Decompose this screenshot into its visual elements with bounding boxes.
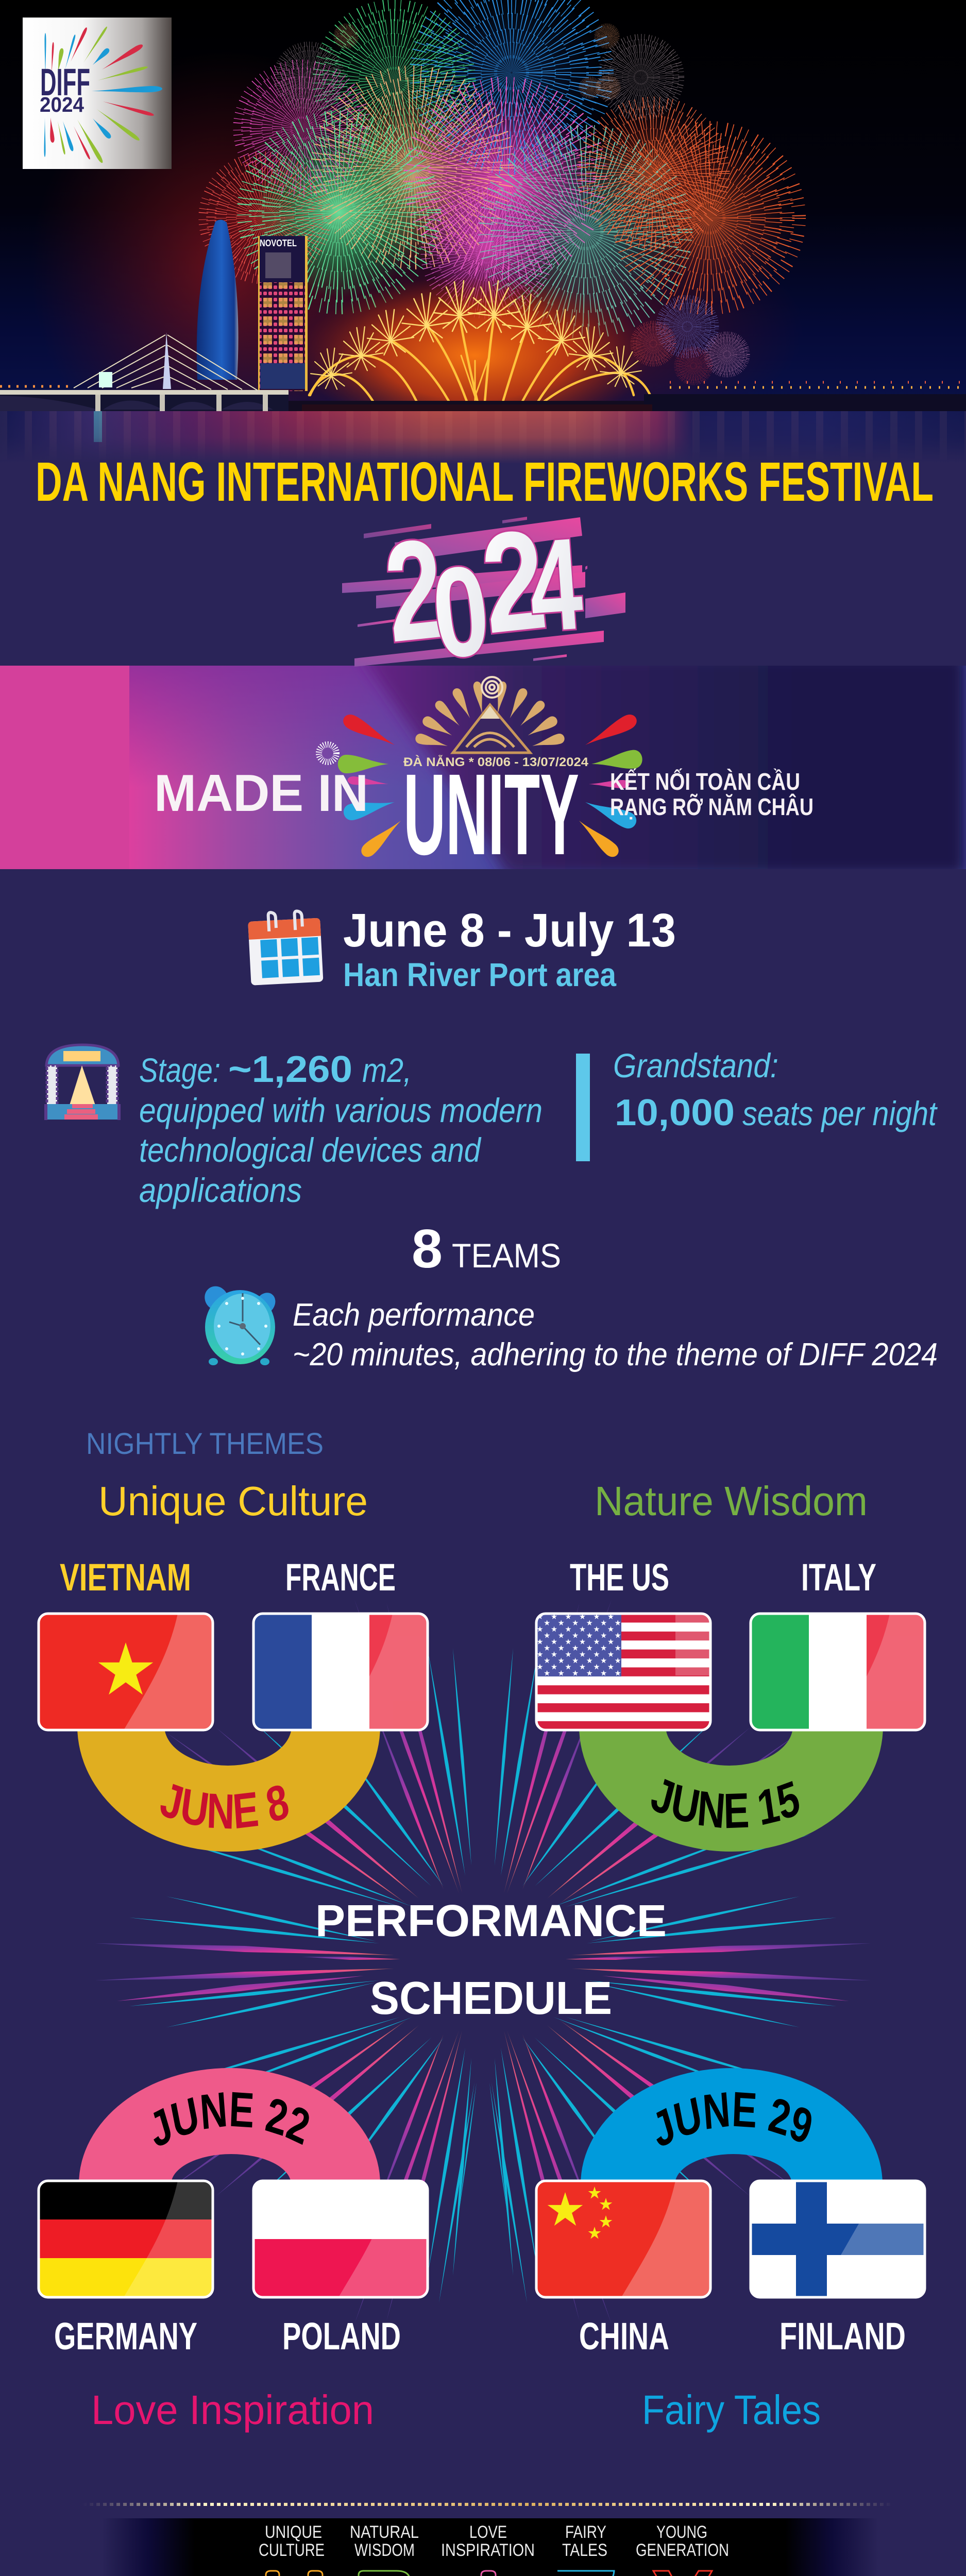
logo wordmark 2024: 2024 — [40, 93, 84, 116]
country: China — [536, 2181, 710, 2358]
slogan: RẠNG RỠ NĂM CHÂU — [610, 793, 814, 820]
letter I — [462, 2571, 515, 2576]
stage text: equipped with various modern — [139, 1091, 543, 1129]
icon: alarm clock — [200, 1282, 279, 1365]
strip labels: GENERATION — [636, 2540, 729, 2560]
theme names — [98, 1478, 868, 1524]
strip labels: TALES — [562, 2540, 607, 2560]
date — [161, 1784, 289, 1829]
country: Poland: POLAND — [282, 2315, 401, 2358]
nightly themes label: NIGHTLY THEMES — [86, 1427, 324, 1461]
country: France — [253, 1556, 428, 1730]
stage text: applications — [139, 1171, 302, 1209]
dates and venue — [247, 904, 676, 993]
logo wordmark DIFF: DIFF — [40, 61, 90, 104]
strip labels: INSPIRATION — [441, 2540, 535, 2560]
performance schedule heading — [315, 1896, 667, 2024]
strip labels: YOUNG — [656, 2522, 707, 2542]
performance duration — [200, 1282, 938, 1372]
country: Italy: ITALY — [801, 1556, 876, 1599]
emblem triangle — [453, 705, 530, 753]
UNITY: UNITY — [403, 750, 579, 879]
performance schedule heading: PERFORMANCE — [315, 1896, 667, 1946]
stage facts — [44, 1045, 543, 1209]
letter Y — [653, 2571, 714, 2576]
slogan — [610, 768, 814, 820]
panel: June 29 — [536, 2068, 925, 2358]
strip labels — [259, 2522, 729, 2560]
stage text: Stage: — [139, 1051, 221, 1089]
banner: Made in Unity theme — [0, 654, 966, 879]
country: France: FRANCE — [285, 1556, 396, 1599]
river water reflection — [0, 411, 966, 464]
stage text — [139, 1049, 543, 1209]
arc — [77, 1726, 380, 1852]
country: Vietnam — [39, 1556, 213, 1730]
numerals: 2 — [378, 509, 451, 672]
letter N — [358, 2571, 430, 2576]
date: JUNE 22 — [154, 2092, 309, 2145]
theme names lower: Fairy Tales — [642, 2387, 821, 2433]
speed stripes — [342, 517, 625, 667]
coloured teardrops — [338, 711, 643, 860]
date: JUNE 29 — [656, 2092, 811, 2145]
duration text — [293, 1297, 938, 1372]
country: Poland — [253, 2181, 428, 2358]
strip labels: UNIQUE — [265, 2522, 322, 2542]
duration text: Each performance — [293, 1297, 535, 1333]
panel: June 22 — [37, 2068, 429, 2358]
date: June 8 - July 13 — [343, 904, 676, 957]
burst rays behind the schedule — [95, 1600, 871, 2324]
stage text: ~1,260 — [228, 1049, 352, 1090]
grandstand text: Grandstand: — [613, 1046, 778, 1084]
country: Germany: GERMANY — [54, 2315, 197, 2358]
dotted divider — [83, 2503, 893, 2506]
country: The US — [536, 1556, 710, 1730]
theme names lower: Love Inspiration — [91, 2387, 374, 2433]
panel: June 15 — [535, 1556, 926, 1852]
hero photo: fireworks over the Han River — [0, 0, 966, 484]
venue: Han River Port area — [343, 956, 616, 993]
country: Germany — [39, 2181, 213, 2358]
8 teams: TEAMS — [452, 1236, 561, 1275]
strip labels: CULTURE — [259, 2540, 325, 2560]
stage text: technological devices and — [139, 1131, 482, 1169]
strip labels: LOVE — [469, 2522, 507, 2542]
theme names lower — [91, 2387, 821, 2433]
shoreline and lights — [0, 382, 966, 411]
country: China: CHINA — [579, 2315, 669, 2358]
MADE IN: MADE IN — [154, 765, 368, 822]
theme names: Nature Wisdom — [595, 1478, 868, 1524]
UNITY themes strip — [101, 2518, 878, 2576]
strip labels: NATURAL — [350, 2522, 419, 2542]
theme emblem rays — [414, 681, 566, 751]
arc — [579, 1726, 883, 1852]
8 teams: 8 — [412, 1218, 443, 1279]
theme names: Unique Culture — [98, 1478, 368, 1524]
strip labels: WISDOM — [354, 2540, 415, 2560]
country: The US: THE US — [570, 1556, 669, 1599]
numerals: 4 — [524, 511, 586, 659]
date — [651, 1778, 799, 1828]
festival logo DIFF 2024 — [23, 18, 172, 169]
numerals — [378, 500, 586, 685]
date — [154, 2092, 309, 2145]
date: JUNE 8 — [161, 1784, 289, 1829]
towers and bridge: NOVOTEL — [260, 238, 297, 248]
panel: June 8 — [37, 1556, 429, 1852]
date: JUNE 15 — [651, 1778, 799, 1828]
strip labels: FAIRY — [565, 2522, 606, 2542]
performance schedule heading: SCHEDULE — [370, 1973, 612, 2024]
grandstand text — [613, 1046, 938, 1133]
country: Finland: FINLAND — [779, 2315, 906, 2358]
small dotted ring — [319, 744, 336, 762]
icon: calendar — [247, 910, 324, 986]
country: Vietnam: VIETNAM — [60, 1556, 191, 1599]
country: Italy — [751, 1556, 925, 1730]
2024 year graphic — [342, 500, 625, 685]
numerals: 0 — [426, 538, 496, 685]
slogan: KẾT NỐI TOÀN CẦU — [610, 768, 800, 795]
grandstand text: seats per night — [742, 1094, 938, 1132]
stage text: m2, — [362, 1051, 412, 1089]
towers and bridge — [0, 219, 308, 412]
icon: stage — [44, 1045, 121, 1120]
accent bar — [576, 1054, 590, 1161]
emblem date line: ĐÀ NẴNG * 08/06 - 13/07/2024 — [403, 755, 589, 769]
gold fountain fireworks — [309, 316, 650, 409]
letter U — [266, 2571, 323, 2576]
country: Finland — [751, 2181, 925, 2358]
numerals: 2 — [475, 500, 553, 664]
8 teams — [412, 1218, 561, 1279]
grandstand text: 10,000 — [615, 1092, 735, 1133]
arc — [79, 2068, 380, 2184]
letter T — [557, 2571, 614, 2576]
emblem rings — [482, 677, 502, 698]
grandstand facts — [576, 1046, 938, 1161]
logo rays — [44, 26, 162, 164]
arc — [581, 2068, 883, 2184]
